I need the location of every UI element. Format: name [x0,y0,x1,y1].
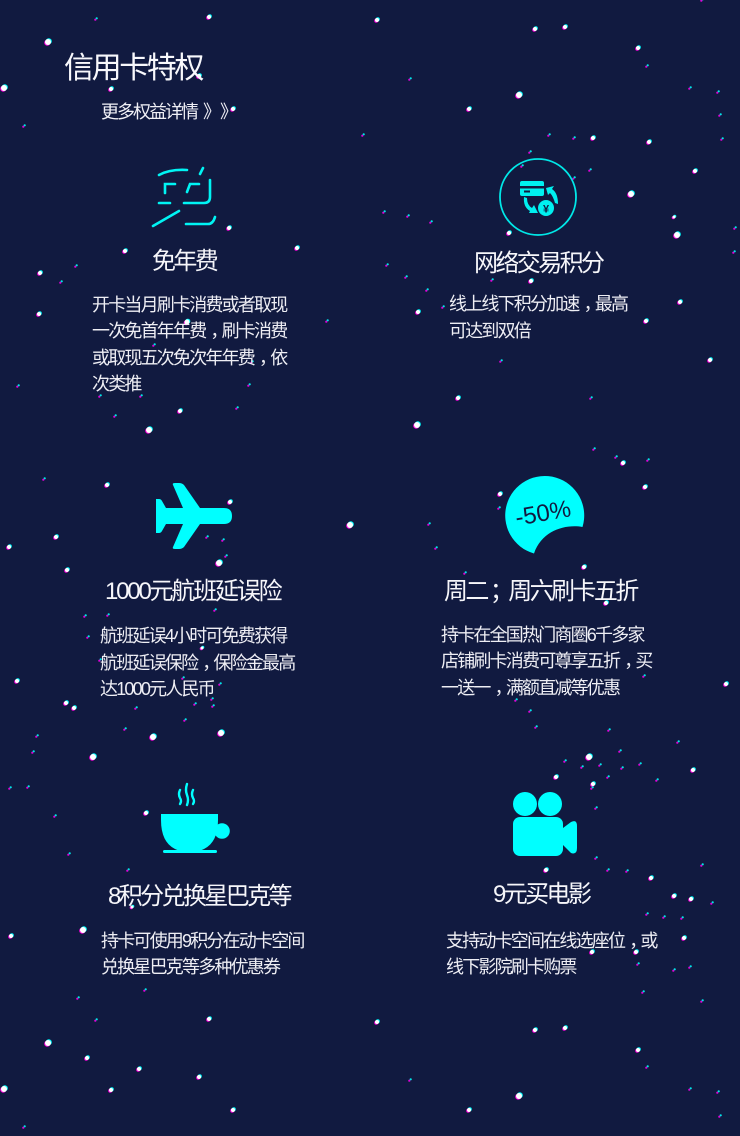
description: 航班延误保险 ，保险金最高 [100,653,294,673]
panel: Starbucks points [101,782,304,977]
description: 持卡可使用9积分在动卡空间 [101,930,304,950]
description [100,626,296,699]
panel: annual fee waiver [92,166,288,394]
heading: 9元买电影 [493,881,589,908]
description: 支持动卡空间在线选座位 ，或 [446,930,657,950]
description: 持卡在全国热门商圈6千多家 [441,624,644,644]
icon: -50% badge: -50% [513,495,573,532]
description [441,624,652,698]
icon: card and yen in circle: ¥ [543,204,550,216]
description: 次类推 [92,374,141,394]
description: 或取现五次免次年年费 ，依 [92,348,286,368]
description [101,930,304,977]
description: 开卡当月刷卡消费或者取现 [92,294,286,314]
panel: 9 yuan movie [446,792,658,977]
icon: mian character [152,166,216,228]
description [446,930,658,977]
title: 信用卡特权 [64,52,202,85]
panel: half price Tue and Sat [441,476,652,698]
icon: card and yen in circle [499,158,577,236]
icon: coffee cup [161,782,230,853]
description: 店铺刷卡消费可尊享五折 ，买 [441,651,652,671]
heading: 网络交易积分 [474,250,602,277]
description: 兑换星巴克等多种优惠券 [101,957,279,977]
panel: flight delay insurance [100,483,296,699]
description: 一次免首年年费 ，刷卡消费 [92,321,286,341]
description: 可达到双倍 [449,321,530,341]
heading: 8积分兑换星巴克等 [108,883,290,910]
description [449,294,628,341]
panel: online transaction points [449,158,628,341]
link: more benefits: 更多权益详情 》 》 [101,102,236,122]
description: 航班延误4小时可免费获得 [100,626,286,646]
description: 线下影院刷卡购票 [446,957,576,977]
heading: 周二；周六刷卡五折 [444,578,637,605]
heading: 1000元航班延误险 [105,578,280,605]
description: 线上线下积分加速 ，最高 [449,294,627,314]
icon: movie camera [513,792,577,856]
description: 一送一 ，满额直减等优惠 [441,678,619,698]
description: 达1000元人民币 [100,679,214,699]
icon: -50% badge [505,476,584,554]
heading: 免年费 [152,248,216,275]
icon: airplane [156,483,232,549]
description [92,294,288,394]
